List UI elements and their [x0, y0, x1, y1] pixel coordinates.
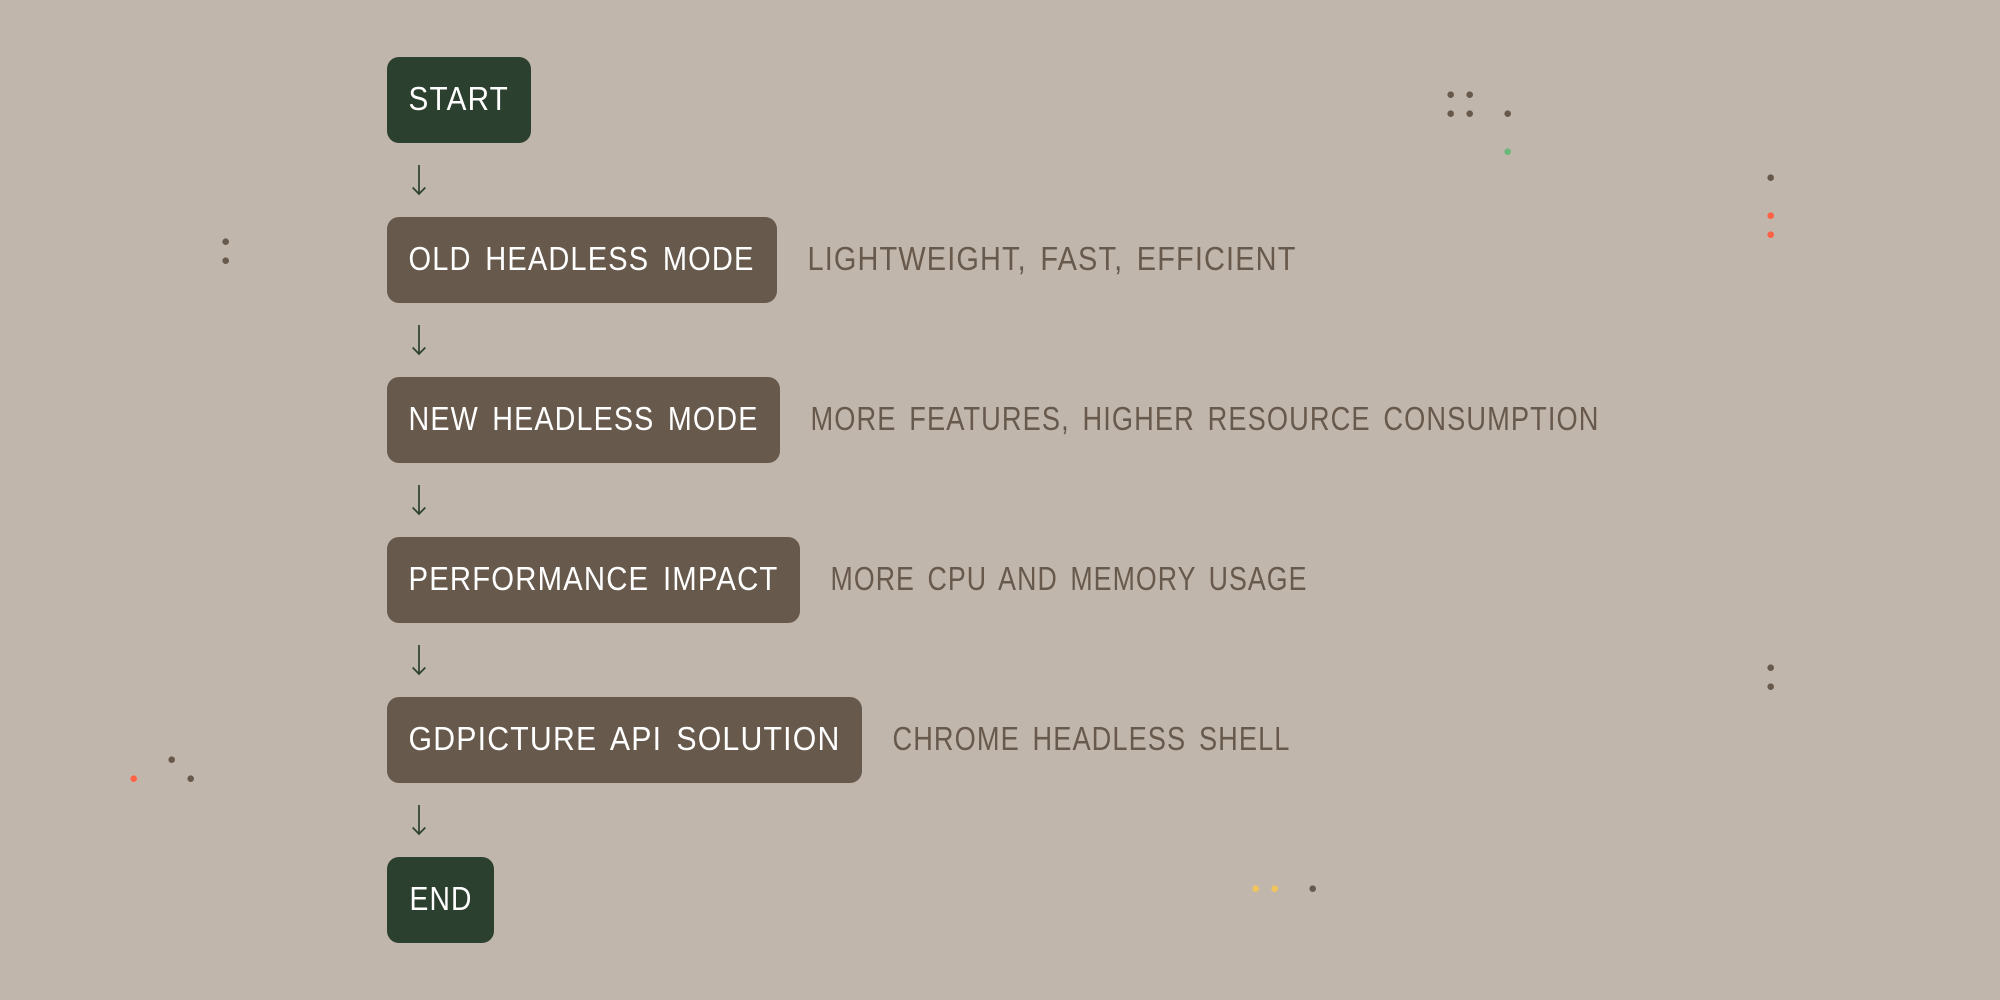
node: end: [387, 857, 494, 943]
node: gdpicture api solution: [387, 697, 862, 783]
arrow: old to new headless mode: [413, 325, 425, 354]
node: end: END: [410, 880, 472, 917]
decorative dots: right column lower: [1767, 664, 1774, 690]
node: new headless mode: NEW HEADLESS MODE: [408, 400, 758, 437]
node: start: [387, 57, 531, 143]
node: new headless mode: [387, 377, 780, 463]
node: start: START: [408, 80, 509, 117]
decorative dots: bottom centre: [1252, 885, 1316, 892]
node: old headless mode: OLD HEADLESS MODE: [408, 240, 754, 277]
arrow: start to old headless mode: [413, 165, 425, 194]
node: gdpicture api solution: GDPICTURE API SOLUTION: [408, 720, 840, 757]
arrow: gdpicture api solution to end: [413, 805, 425, 834]
node: performance impact: PERFORMANCE IMPACT: [408, 560, 778, 597]
arrow: new headless mode to performance impact: [413, 485, 425, 514]
description: gdpicture api solution: CHROME HEADLESS SHELL: [892, 720, 1290, 757]
description: new headless mode: MORE FEATURES, HIGHER RESOURCE CONSUMPTION: [810, 400, 1600, 437]
arrow: performance impact to gdpicture api solution: [413, 645, 425, 674]
decorative dots: right column upper: [1767, 174, 1774, 238]
decorative dots: top right cluster: [1447, 91, 1511, 155]
description: old headless mode: LIGHTWEIGHT, FAST, EFFICIENT: [808, 240, 1296, 277]
decorative dots: bottom left: [130, 756, 194, 782]
description: performance impact: MORE CPU AND MEMORY USAGE: [830, 560, 1308, 597]
node: performance impact: [387, 537, 800, 623]
decorative dots: left upper: [222, 238, 229, 264]
node: old headless mode: [387, 217, 777, 303]
